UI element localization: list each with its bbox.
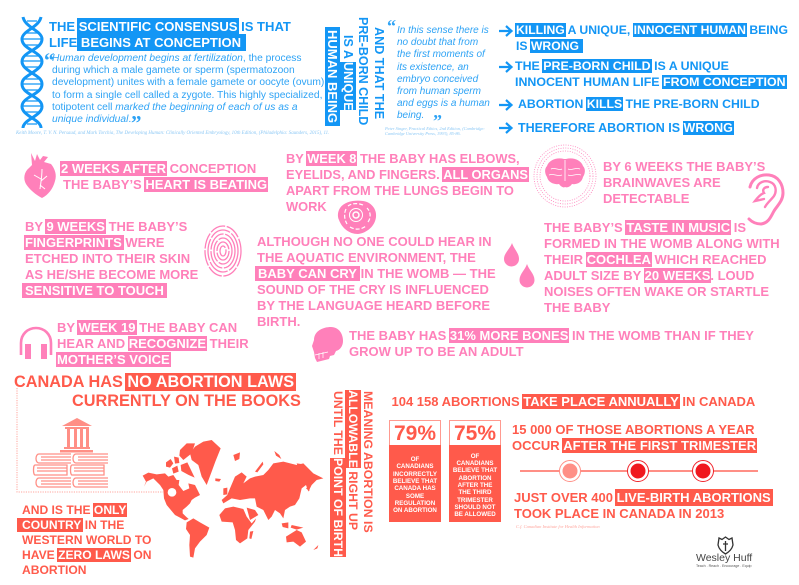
dotted frame line <box>16 388 163 492</box>
text: week 19 <box>56 320 249 367</box>
text: heart beating <box>60 161 268 192</box>
citation: Singer <box>385 126 485 136</box>
text: only country: COUNTRY IN THE <box>22 518 124 532</box>
text: baby can cry: BIRTH. <box>257 314 300 329</box>
quote: human development: unique individual. <box>52 114 131 125</box>
arrow 3 <box>499 99 513 111</box>
world map with Canada marker <box>142 440 324 558</box>
vertical text: and that the pre-born child is a unique human being: PRE-BORN CHILD <box>356 17 370 125</box>
arrow 2 <box>499 61 513 73</box>
text: week 8: APART FROM THE LUNGS BEGIN TO <box>286 183 514 198</box>
premise 1: IS WRONG <box>516 38 579 52</box>
arrow 4 <box>499 122 513 134</box>
icon: closing quote mark 2: ” <box>433 111 442 131</box>
text: brainwaves: BY 6 WEEKS THE BABY’S <box>603 159 765 174</box>
stat box: 79% <box>389 420 441 522</box>
text: only country: ABORTION <box>22 563 86 577</box>
text: annual abortions: 104 158 ABORTIONS TAKE PLACE ANNUALLY IN CANADA <box>392 394 755 409</box>
stat box: 79%: SOME <box>406 493 424 500</box>
vertical text: meaning abortion is allowable: ALLOWABLE RIGHT UP <box>346 390 360 530</box>
text: week 8: EYELIDS, AND FINGERS. ALL ORGANS <box>286 167 528 182</box>
stat box: 79%: REGULATION <box>395 500 435 507</box>
text: live-birth abortions: TOOK PLACE IN CANADA IN 2013 <box>514 506 724 520</box>
text: live-birth abortions: JUST OVER 400 LIVE-BIRTH ABORTIONS <box>514 490 771 504</box>
stat box: 75% <box>449 420 501 522</box>
icon: heart <box>24 153 56 198</box>
vertical text: meaning abortion is allowable <box>330 390 375 557</box>
icon: headphones <box>20 326 52 359</box>
icon: tear drops <box>504 243 534 288</box>
citation: CIHI: C.f. Canadian Institute for Health Information <box>516 524 600 529</box>
quote: in this sense: In this sense there is <box>397 25 489 36</box>
vertical text: and that the pre-born child is a unique human being <box>325 17 386 126</box>
stat box: 75%: OF <box>471 452 479 460</box>
stat box: 79%: CANADIANS <box>396 463 434 470</box>
icon: ear <box>748 173 784 226</box>
icon: courthouse on law books <box>32 418 108 488</box>
stat box: 75%: BELIEVE THAT <box>453 467 497 474</box>
wordmark: Wesley Huff <box>696 552 752 564</box>
heading: no abortion laws: CANADA HAS NO ABORTION LAWS <box>14 373 294 391</box>
stat box: 79%: BELIEVE THAT <box>393 478 437 485</box>
text: more bones: GROW UP TO BE AN ADULT <box>349 344 524 358</box>
text: more bones: THE BABY HAS 31% MORE BONES IN THE WOMB THAN IF THEY <box>349 328 754 342</box>
text: taste in music: THEIR COCHLEA WHICH REACHED <box>544 252 766 267</box>
text: fingerprints: AS HE/SHE BECOME MORE <box>25 267 198 282</box>
text: heart beating: 2 WEEKS AFTER CONCEPTION <box>61 161 256 176</box>
icon: DNA helix <box>20 16 44 128</box>
quote: human development <box>52 53 324 125</box>
text: brainwaves: BRAINWAVES ARE <box>603 175 721 190</box>
timeline <box>520 460 758 482</box>
quote: human development: totipotent cell marked the beginning of each of us as a <box>52 102 298 113</box>
text: fingerprints <box>22 219 198 298</box>
quote: in this sense: the first moments of <box>397 49 485 60</box>
argument: syllogism <box>499 23 788 135</box>
vertical text: and that the pre-born child is a unique human being: HUMAN BEING <box>325 30 340 123</box>
stat box: 75%: BE ALLOWED <box>454 511 496 518</box>
citation: Moore: Keith Moore, T. V. N. Persaud, and Mark Torchia, The Developing Human: Clinically Oriented Embryology, 10th Edition, (Philadelphia: Saunders, 2015), 11. <box>16 131 329 136</box>
premise 2 <box>515 59 787 89</box>
quote: in this sense: embryo conceived <box>397 74 478 85</box>
icon: opening quote mark: “ <box>44 48 54 72</box>
vertical text: meaning abortion is allowable: MEANING ABORTION IS <box>361 391 375 533</box>
text: week 19: HEAR AND RECOGNIZE THEIR <box>57 336 249 351</box>
text: fingerprints: BY 9 WEEKS THE BABY’S <box>25 219 187 234</box>
stat box: 75%: THE THIRD <box>458 489 492 496</box>
text: baby can cry: ALTHOUGH NO ONE COULD HEAR IN <box>257 234 491 249</box>
text: only country: WESTERN WORLD TO <box>22 533 151 547</box>
logo: Wesley Huff <box>694 535 756 572</box>
premise 1: KILLING A UNIQUE, INNOCENT HUMAN BEING <box>516 23 788 37</box>
heading: no abortion laws: CURRENTLY ON THE BOOKS <box>72 392 301 410</box>
text: baby can cry: BABY CAN CRY IN THE WOMB — THE <box>258 266 496 281</box>
premise 3: ABORTION KILLS THE PRE-BORN CHILD <box>518 97 760 111</box>
text: taste in music <box>544 220 780 315</box>
premise 2: INNOCENT HUMAN LIFE FROM CONCEPTION <box>515 74 786 88</box>
citation: Singer: Peter Singer, Practical Ethics, 2nd Edition, (Cambridge: <box>385 126 485 131</box>
text: fingerprints: SENSITIVE TO TOUCH <box>25 283 164 298</box>
icon: opening quote mark 2: “ <box>387 16 396 36</box>
heading: no abortion laws <box>14 373 301 410</box>
stat box: 79%: OF <box>411 456 419 463</box>
text: week 19: BY WEEK 19 THE BABY CAN <box>57 320 237 335</box>
text: only country: HAVE ZERO LAWS ON <box>22 548 151 562</box>
text: only country: AND IS THE ONLY <box>22 503 126 517</box>
text: brainwaves: DETECTABLE <box>603 191 689 206</box>
text: after first trimester: 15 000 OF THOSE ABORTIONS A YEAR <box>512 422 754 437</box>
icon: cell <box>338 200 376 234</box>
premise 1 <box>515 23 788 53</box>
text: taste in music: THE BABY <box>544 300 610 315</box>
arrow 1 <box>499 25 513 37</box>
text: baby can cry: SOUND OF THE CRY IS INFLUENCED <box>257 282 489 297</box>
conclusion: THEREFORE ABORTION IS WRONG <box>518 120 733 134</box>
text: taste in music: NOISES OFTEN WAKE OR STARTLE <box>544 284 769 299</box>
vertical text: and that the pre-born child is a unique human being: IS A UNIQUE <box>341 35 355 110</box>
quote: human development: Human development begins at fertilization, the process <box>52 53 302 64</box>
quote: in this sense: no doubt that from <box>397 37 478 48</box>
quote: in this sense: and eggs is a human <box>397 98 490 109</box>
text: week 8: WORK <box>286 199 327 214</box>
quote: human development: development) unites with a female gamete or oocyte (ovum) <box>52 77 324 88</box>
text: after first trimester <box>512 422 757 453</box>
vertical text: and that the pre-born child is a unique human being: AND THAT THE <box>372 27 386 119</box>
icon: brain with rings <box>534 144 596 208</box>
icon: skull <box>312 327 343 362</box>
text: fingerprints: FINGERPRINTS WERE <box>25 235 164 250</box>
heading: scientific consensus: THE SCIENTIFIC CONSENSUS IS THAT <box>49 19 291 34</box>
text: taste in music: ADULT SIZE BY 20 WEEKS. LOUD <box>544 268 754 283</box>
quote: in this sense: being. <box>397 110 424 121</box>
stat box: 79%: ON ABORTION <box>393 507 437 514</box>
stat box: 79%: CANADA HAS <box>394 485 436 492</box>
stat box: 75%: 75% <box>454 422 496 445</box>
text: after first trimester: OCCUR AFTER THE FIRST TRIMESTER <box>512 438 756 453</box>
premise 2: THE PRE-BORN CHILD IS A UNIQUE <box>515 59 729 73</box>
icon: shield <box>717 536 734 555</box>
quote: human development: during which a male gamete or sperm (spermatozoon <box>52 65 295 76</box>
stat box: 75%: TRIMESTER <box>457 497 493 504</box>
text: baby can cry <box>255 234 496 329</box>
text: week 19: MOTHER’S VOICE <box>57 352 170 367</box>
stat box: 75%: SHOULD NOT <box>455 504 495 511</box>
text: baby can cry: BY THE LANGUAGE HEARD BEFORE <box>257 298 490 313</box>
heading: scientific consensus: LIFE BEGINS AT CONCEPTION <box>49 34 241 50</box>
stat box: 79%: INCORRECTLY <box>393 471 437 478</box>
quote: in this sense <box>397 25 490 121</box>
text: heart beating: THE BABY’S HEART IS BEATING <box>63 177 267 192</box>
quote: human development: to form a single cell called a zygote. This highly specialized, <box>52 90 322 101</box>
text: taste in music: FORMED IN THE WOMB ALONG WITH <box>544 236 780 251</box>
text: baby can cry: THE AQUATIC ENVIRONMENT, THE <box>257 250 476 265</box>
quote: in this sense: its existence, an <box>397 62 469 73</box>
text: only country <box>17 503 151 577</box>
vertical text: meaning abortion is allowable: UNTIL THE POINT OF BIRTH <box>331 391 345 557</box>
quote: in this sense: from human sperm <box>397 86 481 97</box>
text: more bones <box>349 328 754 358</box>
stat box: 79%: 79% <box>394 422 436 445</box>
text: week 8: BY WEEK 8 THE BABY HAS ELBOWS, <box>286 151 520 166</box>
text: taste in music: THE BABY’S TASTE IN MUSIC IS <box>544 220 746 235</box>
stat box: 75%: AFTER THE <box>458 482 492 489</box>
text: live-birth abortions <box>514 490 771 522</box>
icon: fingerprint <box>204 225 242 277</box>
stat box: 75%: CANADIANS <box>456 460 494 467</box>
text: brainwaves <box>603 159 765 206</box>
tagline: Teach . Reach . Encourage . Equip <box>696 564 752 568</box>
text: fingerprints: ETCHED INTO THEIR SKIN <box>25 251 190 266</box>
text: week 8 <box>286 151 529 214</box>
stat box: 75%: ABORTION <box>458 475 492 482</box>
citation: Singer: Cambridge University Press, 1993), 85-86. <box>385 131 461 136</box>
icon: closing quote mark: ” <box>131 111 142 135</box>
heading: scientific consensus <box>49 18 291 51</box>
